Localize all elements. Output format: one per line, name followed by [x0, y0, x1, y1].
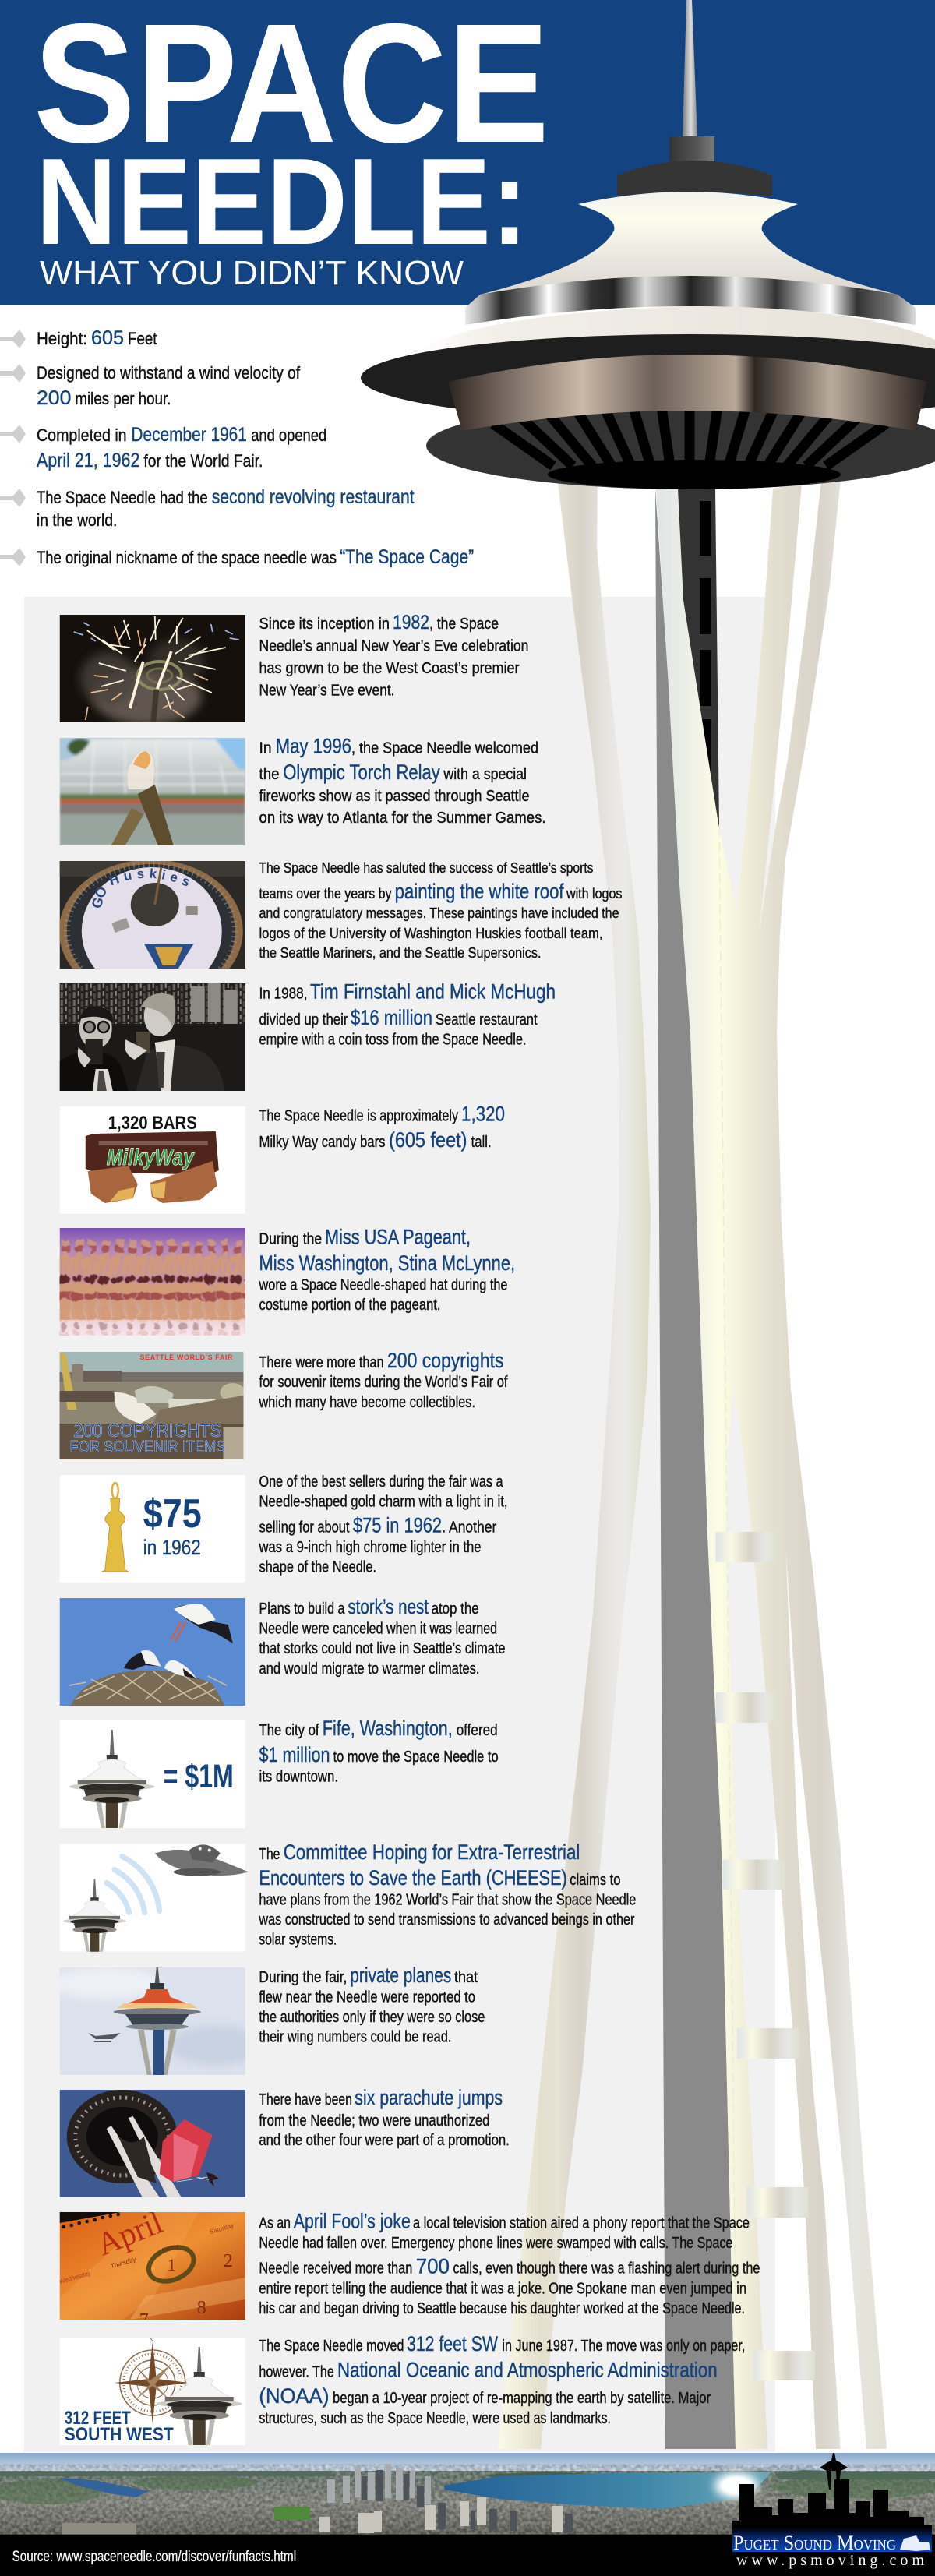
- fact row: painted roof: [59, 860, 622, 969]
- photo: April calendar: 8: [197, 2298, 206, 2318]
- text: gold charm: shape of the Needle.: [259, 1559, 376, 1576]
- photo: World's Fair postcard: FOR SOUVENIR ITEMS: [70, 1438, 226, 1456]
- company name: Puget Sound Moving: [733, 2532, 896, 2554]
- fact: nickname: “The Space Cage”: [340, 546, 474, 568]
- photo: April calendar: Friday: [161, 2243, 180, 2254]
- text: April Fool's joke: his car and began driving to Seattle because his daughter worked at the Space Needle.: [259, 2300, 745, 2317]
- text: gold charm: selling for about: [259, 1519, 350, 1537]
- text: CHEESE committee: claims to: [570, 1872, 620, 1889]
- fact row: 312 feet move: [60, 2332, 745, 2445]
- fact: height: Height:: [37, 329, 87, 348]
- fact row: coin toss: [60, 979, 556, 1091]
- text: private planes: [259, 1964, 485, 2046]
- text: pageant: Miss USA Pageant,: [325, 1226, 471, 1249]
- photo: World's Fair postcard: 200 COPYRIGHTS: [73, 1420, 221, 1442]
- bullet list: quick facts: [0, 327, 474, 568]
- needle silhouette: [820, 2453, 848, 2490]
- photo: needle equals one million: [60, 1720, 245, 1828]
- text: painted roof: the Seattle Mariners, and the Seattle Supersonics.: [259, 945, 541, 961]
- website: www.psmoving.com: [736, 2552, 924, 2569]
- text: gold charm: was a 9-inch high chrome lighter in the: [259, 1539, 482, 1556]
- text: 312 feet move: [259, 2332, 745, 2427]
- skyline silhouette: [732, 2479, 932, 2552]
- text: CHEESE committee: [259, 1840, 636, 1949]
- text: Olympic Torch: the: [259, 766, 279, 783]
- text: painted roof: and congratulatory messages. These paintings have included the: [259, 905, 619, 921]
- text: stork nest: Plans to build a: [259, 1600, 345, 1618]
- text: parachute jumps: There have been: [259, 2091, 352, 2108]
- left leg: [498, 483, 651, 2449]
- text: candy bars: 1,320: [461, 1103, 505, 1126]
- chrome band: [465, 276, 916, 325]
- text: private planes: the authorities only if they were so close: [259, 2009, 485, 2026]
- header band: [0, 0, 935, 305]
- text: Olympic Torch: with a special: [443, 766, 527, 783]
- text: gold charm: One of the best sellers during the fair was a: [259, 1473, 503, 1491]
- dark elevator column: [678, 489, 719, 826]
- fact: wind velocity: Designed to withstand a wind velocity of: [37, 363, 301, 383]
- fact row: CHEESE committee: [60, 1840, 636, 1952]
- text: New Year's Eve: [259, 612, 528, 700]
- title: [34, 0, 549, 292]
- text: April Fool's joke: 700: [416, 2255, 450, 2278]
- text: candy bars: tall.: [471, 1134, 492, 1151]
- text: coin toss: Seattle restaurant: [436, 1011, 538, 1029]
- text: painted roof: logos of the University of Washington Huskies football team,: [259, 926, 603, 941]
- seam line: [719, 826, 736, 2306]
- text: private planes: flew near the Needle were reported to: [259, 1989, 475, 2006]
- text: April Fool's joke: a local television station aired a phony report that the Space: [413, 2214, 750, 2232]
- text: private planes: that: [454, 1969, 478, 1986]
- text: Olympic Torch: on its way to Atlanta for the Summer Games.: [259, 810, 545, 827]
- text: pageant: [259, 1226, 515, 1314]
- text: Fife offer: The city of: [259, 1722, 319, 1739]
- text: stork nest: atop the: [432, 1600, 479, 1618]
- text: New Year's Eve: Needle’s annual New Year’s Eve celebration: [259, 637, 528, 655]
- truck icon: [900, 2535, 930, 2551]
- fact: wind velocity: miles per hour.: [75, 389, 171, 408]
- source line: Source: www.spaceneedle.com/discover/funfacts.html: [12, 2549, 296, 2565]
- fact: nickname: [0, 546, 474, 568]
- text: CHEESE committee: was constructed to send transmissions to advanced beings in other: [259, 1911, 635, 1928]
- text: Fife offer: to move the Space Needle to: [333, 1749, 499, 1766]
- text: Fife offer: its downtown.: [259, 1769, 338, 1786]
- fact row: parachute jumps: [60, 2086, 510, 2197]
- fact: completion dates: and opened: [251, 425, 326, 445]
- fact row: souvenir copyrights: [59, 1349, 508, 1459]
- fact row: candy bars: [60, 1103, 505, 1214]
- text: April Fool's joke: calls, even though there was a flashing alert during the: [453, 2260, 760, 2278]
- text: New Year's Eve: New Year’s Eve event.: [259, 683, 394, 700]
- fact: completion dates: Completed in: [37, 425, 127, 445]
- photo: parachutist beside the needle: [59, 2090, 245, 2197]
- photo: compass and needle: [60, 2337, 245, 2445]
- text: Olympic Torch: fireworks show as it passed through Seattle: [259, 788, 530, 805]
- ladder rungs: [716, 1532, 815, 2380]
- photo: April calendar: 2: [224, 2251, 233, 2271]
- text: candy bars: [259, 1103, 505, 1152]
- inner underside: [548, 460, 841, 489]
- text: painted roof: teams over the years by: [259, 886, 391, 902]
- text: Fife offer: Fife, Washington,: [323, 1717, 453, 1740]
- fact: height: 605: [91, 327, 124, 349]
- text: candy bars: (605 feet): [389, 1128, 468, 1152]
- text: souvenir copyrights: [259, 1349, 508, 1411]
- photo: olympic torches: [59, 738, 245, 845]
- text: parachute jumps: six parachute jumps: [355, 2086, 503, 2109]
- photo: painted roof: GO: [89, 884, 110, 910]
- antenna mast: [683, 0, 697, 137]
- text: pageant: wore a Space Needle-shaped hat during the: [259, 1276, 508, 1293]
- fact: completion dates: [0, 424, 326, 471]
- fact row: stork nest: [60, 1595, 505, 1706]
- text: painted roof: The Space Needle has saluted the success of Seattle’s sports: [259, 860, 594, 876]
- text: painted roof: with logos: [566, 886, 622, 902]
- fact: wind velocity: 200: [37, 387, 71, 409]
- fact: height: Feet: [128, 329, 157, 348]
- photo: fireworks: [59, 615, 245, 722]
- text: stork nest: that storks could not live in Seattle’s climate: [259, 1640, 505, 1657]
- text: painted roof: painting the white roof: [395, 880, 564, 903]
- black upper disk: [361, 334, 935, 422]
- mast base block: [669, 136, 714, 161]
- text: coin toss: empire with a coin toss from the Space Needle.: [259, 1032, 527, 1049]
- photo: April calendar: [58, 2204, 245, 2331]
- text: Fife offer: $1 million: [259, 1743, 330, 1766]
- fact row: New Year's Eve: [60, 612, 528, 725]
- white roof: [480, 192, 898, 304]
- photo: storks on nest: [59, 1598, 245, 1706]
- photo: World's Fair postcard: [59, 1352, 243, 1459]
- text: coin toss: divided up their: [259, 1011, 348, 1029]
- text: 312 feet move: 312 feet SW: [407, 2332, 498, 2355]
- front and right legs: [656, 478, 887, 2449]
- title: WHAT YOU DIDN’T KNOW: [40, 254, 464, 292]
- text: souvenir copyrights: for souvenir items during the World’s Fair of: [259, 1374, 508, 1391]
- text: New Year's Eve: , the Space: [429, 616, 499, 633]
- text: New Year's Eve: has grown to be the West Coast’s premier: [259, 660, 520, 677]
- text: gold charm: $75 in 1962: [353, 1514, 442, 1537]
- photo: April calendar: Thursday: [110, 2256, 136, 2270]
- text: stork nest: [259, 1595, 505, 1678]
- fact: revolving restaurant: The Space Needle had the: [37, 488, 208, 507]
- text: souvenir copyrights: There were more than: [259, 1354, 383, 1371]
- text: Olympic Torch: In: [259, 740, 271, 757]
- fact row: April Fool's joke: [58, 2204, 760, 2331]
- text: Olympic Torch: Olympic Torch Relay: [283, 760, 440, 784]
- text: CHEESE committee: have plans from the 1962 World’s Fair that show the Space Needle: [259, 1892, 636, 1909]
- text: pageant: costume portion of the pageant.: [259, 1297, 441, 1314]
- text: coin toss: $16 million: [351, 1006, 432, 1029]
- text: private planes: During the fair,: [259, 1969, 347, 1986]
- text: 312 feet move: (NOAA): [259, 2384, 329, 2408]
- photo: gold charm price: in 1962: [143, 1536, 201, 1559]
- fact: revolving restaurant: in the world.: [37, 510, 117, 530]
- text: coin toss: [259, 979, 556, 1049]
- fact row: Olympic Torch: [60, 735, 545, 845]
- text: 312 feet move: in June 1987. The move was only on paper,: [502, 2338, 745, 2355]
- brown observation ring: [448, 355, 927, 431]
- text: April Fool's joke: [259, 2209, 760, 2317]
- lower disk: [426, 402, 935, 489]
- text: gold charm: [259, 1473, 508, 1576]
- photo: April calendar: Saturday: [209, 2221, 235, 2235]
- photo: World's Fair postcard: SEATTLE WORLD’S FAIR: [140, 1353, 233, 1361]
- text: Olympic Torch: May 1996: [276, 735, 351, 758]
- text: April Fool's joke: April Fool’s joke: [294, 2209, 411, 2232]
- text: 312 feet move: however. The: [259, 2364, 334, 2381]
- text: 312 feet move: structures, such as the Space Needle, were used as landmarks.: [259, 2410, 611, 2427]
- logo: Puget Sound Moving: [732, 2453, 932, 2569]
- cream deck: [417, 306, 935, 370]
- fact: revolving restaurant: second revolving restaurant: [212, 486, 415, 508]
- fact: revolving restaurant: [0, 486, 415, 530]
- text: New Year's Eve: Since its inception in: [259, 616, 390, 633]
- footer band: [0, 2535, 935, 2576]
- photo: April calendar: 7: [139, 2310, 149, 2331]
- photo: gold charm price: [60, 1475, 245, 1583]
- text: Olympic Torch: [259, 735, 545, 827]
- fact: height: [0, 327, 157, 349]
- title: NEEDLE:: [36, 133, 528, 270]
- photo: compass and needle: 312 FEET: [65, 2408, 131, 2429]
- text: candy bars: The Space Needle is approximately: [259, 1108, 458, 1125]
- text: Fife offer: offered: [457, 1722, 498, 1739]
- text: April Fool's joke: As an: [259, 2214, 291, 2232]
- panel: facts background: [24, 597, 775, 2452]
- text: souvenir copyrights: 200 copyrights: [387, 1349, 503, 1372]
- text: Fife offer: [259, 1717, 499, 1786]
- text: parachute jumps: from the Needle; two were unauthorized: [259, 2112, 489, 2130]
- photo: compass and needle: N: [150, 2337, 154, 2344]
- text: 312 feet move: The Space Needle moved: [259, 2338, 404, 2355]
- photo: April calendar: 1: [168, 2255, 176, 2274]
- fact: nickname: The original nickname of the space needle was: [37, 548, 337, 567]
- text: pageant: Miss Washington, Stina McLynne,: [259, 1251, 515, 1275]
- text: painted roof: [259, 860, 622, 961]
- fact row: gold charm: [60, 1473, 508, 1583]
- text: coin toss: Tim Firnstahl and Mick McHugh: [310, 979, 556, 1003]
- photo: candy bars: 1,320 BARS: [108, 1113, 197, 1134]
- text: CHEESE committee: Committee Hoping for Extra-Terrestrial: [284, 1840, 580, 1864]
- photo: gold charm price: $75: [143, 1491, 202, 1537]
- photo: April calendar: Wednesday: [58, 2270, 92, 2285]
- fact row: pageant: [50, 1226, 515, 1336]
- text: coin toss: In 1988,: [259, 985, 307, 1002]
- photo: compass and needle: SOUTH WEST: [65, 2424, 174, 2445]
- text: stork nest: Needle were canceled when it was learned: [259, 1621, 497, 1638]
- fact: completion dates: April 21, 1962: [37, 450, 139, 471]
- text: gold charm: . Another: [442, 1519, 497, 1537]
- text: April Fool's joke: Needle had fallen over. Emergency phone lines were swamped with calls. The Space: [259, 2235, 732, 2252]
- text: CHEESE committee: Encounters to Save the Earth (CHEESE): [259, 1866, 567, 1890]
- text: private planes: their wing numbers could be read.: [259, 2029, 451, 2046]
- text: New Year's Eve: 1982: [393, 612, 429, 633]
- photo: needle signalling a UFO: [60, 1844, 248, 1952]
- text: parachute jumps: and the other four were part of a promotion.: [259, 2132, 510, 2149]
- spokes: [493, 407, 886, 466]
- text: parachute jumps: [259, 2086, 510, 2149]
- text: Olympic Torch: , the Space Needle welcomed: [351, 740, 538, 757]
- text: stork nest: stork’s nest: [348, 1595, 429, 1618]
- fact: wind velocity: [0, 363, 301, 409]
- text: souvenir copyrights: which many have become collectibles.: [259, 1394, 475, 1411]
- fact row: private planes: [52, 1964, 485, 2075]
- photo: plane near the needle: [59, 1967, 245, 2075]
- photo: painted roof: Huskies: [109, 868, 189, 886]
- photo: candy bars: [60, 1106, 245, 1214]
- footer panorama: Seattle skyline: [0, 2453, 935, 2535]
- photo: painted roof: [59, 861, 245, 969]
- text: 312 feet move: began a 10-year project of re-mapping the earth by satellite. Major: [333, 2390, 711, 2407]
- text: April Fool's joke: Needle received more than: [259, 2260, 412, 2278]
- text: pageant: During the: [259, 1231, 322, 1248]
- photo: candy bars: MilkyWay: [107, 1145, 195, 1170]
- text: April Fool's joke: entire report telling the audience that it was a joke. One Spokane man even jumped in: [259, 2281, 746, 2298]
- central grey shaft: [655, 489, 736, 2449]
- text: CHEESE committee: solar systems.: [259, 1932, 337, 1949]
- fact row: Fife offer: [60, 1717, 499, 1828]
- text: 312 feet move: National Oceanic and Atmospheric Administration: [337, 2359, 718, 2382]
- photo: pageant contestants: [59, 1228, 245, 1336]
- crown: [617, 161, 772, 196]
- photo: two men drinking: [59, 983, 245, 1091]
- text: gold charm: Needle-shaped gold charm with a light in it,: [259, 1493, 508, 1510]
- text: CHEESE committee: The: [259, 1846, 280, 1863]
- text: private planes: private planes: [350, 1964, 451, 1987]
- text: candy bars: Milky Way candy bars: [259, 1134, 385, 1151]
- fact: completion dates: for the World Fair.: [143, 451, 263, 471]
- illustration: Space Needle tower: [361, 0, 935, 2449]
- text: stork nest: and would migrate to warmer climates.: [259, 1660, 480, 1678]
- photo: April calendar: April: [92, 2204, 168, 2263]
- fact: completion dates: December 1961: [131, 424, 247, 446]
